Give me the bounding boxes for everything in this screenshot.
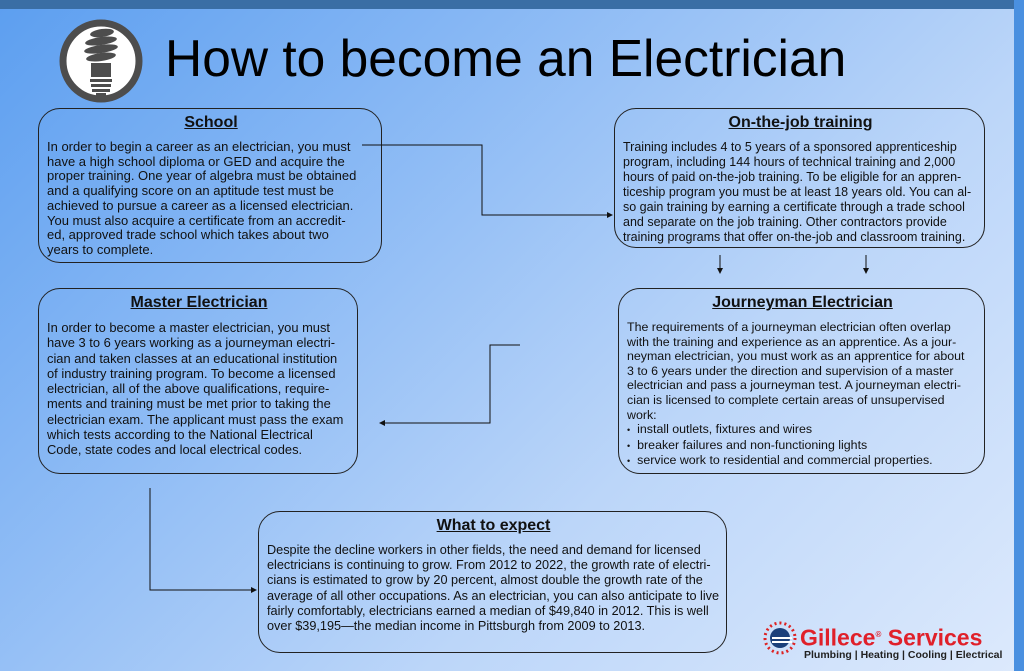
panel: school: and a qualifying score on an aptitude test must be [47, 183, 334, 198]
panel: what to expect [258, 511, 727, 653]
panel: on-the-job training: Training includes 4 to 5 years of a sponsored apprenticeship [623, 140, 957, 154]
panel: what to expect: fairly comfortably, electricians earned a median of $49,840 in 2012. This is well [267, 604, 709, 618]
panel: on-the-job training: program, including 144 hours of technical training and 2,000 [623, 155, 955, 169]
panel: school: You must also acquire a certificate from an accredit- [47, 213, 346, 228]
panel: master electrician: In order to become a master electrician, you must [47, 320, 330, 335]
panel: master electrician: electrician exam. The applicant must pass the exam [47, 412, 343, 426]
panel: school: School [184, 114, 238, 131]
panel: master electrician: which tests according to the National Electrical [47, 427, 313, 442]
panel: master electrician: Master Electrician [131, 294, 267, 311]
panel: on-the-job training: hours of paid on-the-job training. To be eligible for an appren- [623, 170, 961, 184]
panel: what to expect: over $39,195—the median income in Pittsburgh from 2009 to 2013. [267, 619, 645, 633]
panel: what to expect: electricians is continuing to grow. From 2012 to 2022, the growth rate of electri- [267, 558, 711, 572]
panel: journeyman electrician: cian is licensed to complete certain areas of unsupervised [627, 393, 945, 407]
panel: journeyman electrician: install outlets, fixtures and wires [637, 422, 812, 436]
panel: on-the-job training: On-the-job training [728, 114, 872, 131]
panel: school: years to complete. [47, 242, 153, 257]
panel: master electrician: of industry training program. To become a licensed [47, 366, 336, 381]
panel: what to expect: average of all other occupations. As an electrician, you can also anticipate to live [267, 589, 719, 603]
panel: journeyman electrician: service work to residential and commercial properties. [637, 453, 933, 467]
panel: school: proper training. One year of algebra must be obtained [47, 168, 356, 183]
panel: on-the-job training: and separate on the job training. Other contractors provide [623, 215, 947, 229]
panel: journeyman electrician: 3 to 6 years under the direction and supervision of a master [627, 364, 953, 378]
panel: journeyman electrician: electrician and pass a journeyman test. A journeyman electri- [627, 378, 961, 392]
panel: journeyman electrician: breaker failures and non-functioning lights [637, 438, 867, 452]
logo: Gillece Services: Plumbing | Heating | Cooling | Electrical [804, 649, 1002, 661]
panel: master electrician: cian and taken classes at an educational institution [47, 350, 337, 366]
panel: on-the-job training [614, 108, 985, 248]
panel: what to expect: cians is estimated to grow by 20 percent, almost double the growth rate of the [267, 573, 703, 587]
panel: master electrician: have 3 to 6 years working as a journeyman electri- [47, 335, 335, 350]
panel: school [38, 108, 382, 263]
panel: journeyman electrician: neyman electrician, you must work as an apprentice for about [627, 349, 964, 363]
panel: on-the-job training: training programs that offer on-the-job and classroom training. [623, 230, 965, 244]
panel: master electrician: ments and training must be met prior to taking the [47, 396, 331, 411]
panel: school: In order to begin a career as an electrician, you must [47, 139, 350, 154]
logo: Gillece Services [764, 622, 1002, 661]
panel: master electrician [38, 288, 358, 474]
panel: journeyman electrician: with the training and experience as an apprentice. As a jour- [627, 335, 956, 349]
panel: school: achieved to pursue a career as a licensed electrician. [47, 198, 353, 213]
panel: master electrician: Code, state codes and local electrical codes. [47, 442, 302, 457]
panel: what to expect: Despite the decline workers in other fields, the need and demand for licensed [267, 543, 701, 557]
panel: school: have a high school diploma or GED and acquire the [47, 154, 345, 169]
panel: journeyman electrician: Journeyman Electrician [712, 294, 893, 311]
title: How to become an Electrician [165, 29, 846, 87]
panel: on-the-job training: ticeship program you must be at least 18 years old. You can al- [623, 185, 971, 199]
panel: master electrician: electrician, all of the above qualifications, require- [47, 381, 329, 396]
panel: journeyman electrician: The requirements of a journeyman electrician often overlap [627, 320, 951, 334]
icon: light bulb [60, 20, 142, 102]
panel: journeyman electrician [618, 288, 985, 474]
panel: on-the-job training: so gain training by earning a certificate through a trade school [623, 200, 965, 214]
panel: journeyman electrician: work: [627, 408, 657, 422]
logo: Gillece Services: Gillece® Services [800, 625, 982, 651]
panel: school: ed, approved trade school which takes about two [47, 227, 329, 242]
panel: what to expect: What to expect [437, 517, 550, 534]
